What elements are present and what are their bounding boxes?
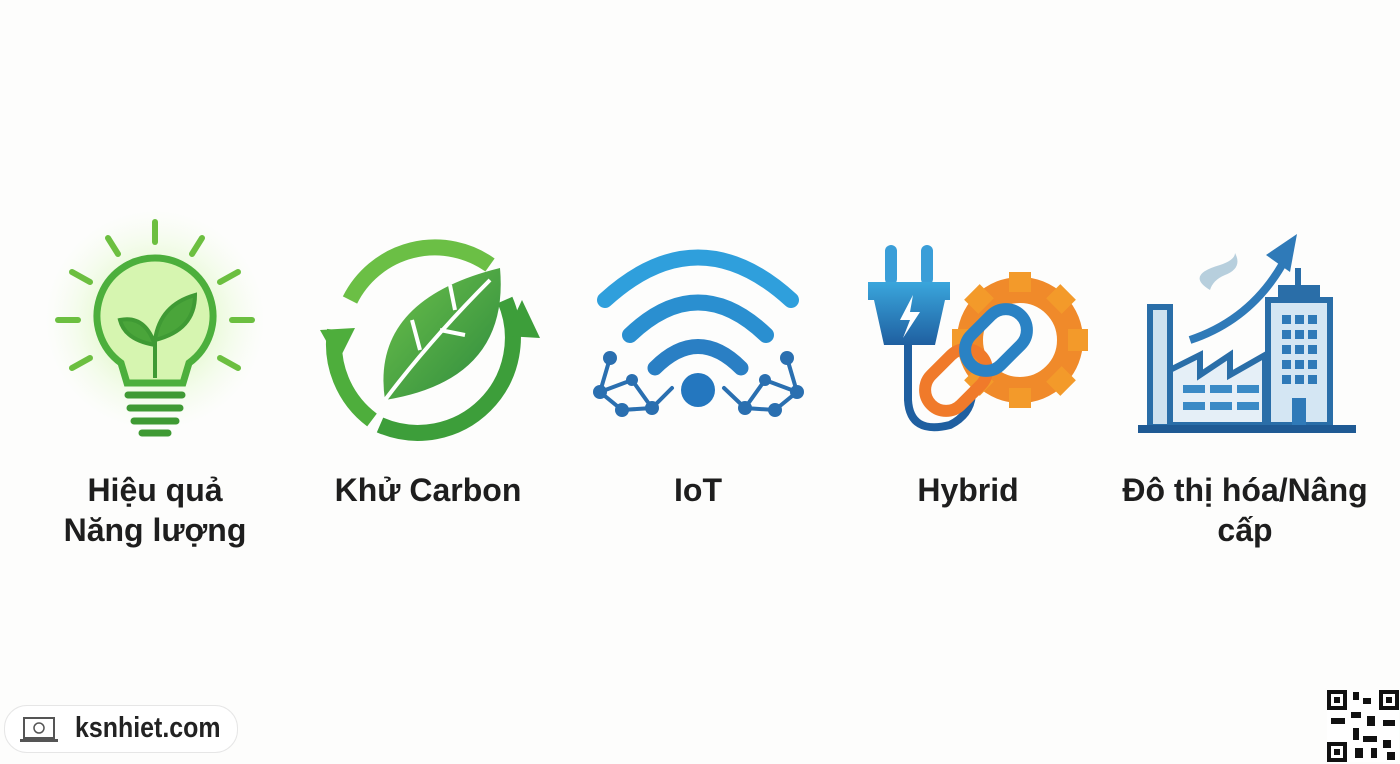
QR code bbox=[1327, 690, 1399, 762]
label: energy efficiency: Năng lượng bbox=[64, 512, 246, 548]
website text: ksnhiet.com bbox=[75, 712, 221, 744]
label: hybrid: Hybrid bbox=[917, 472, 1019, 508]
label: urbanization bbox=[1122, 472, 1368, 548]
label: energy efficiency bbox=[64, 472, 246, 548]
label: urbanization: Đô thị hóa/Nâng bbox=[1122, 472, 1368, 508]
icon: hybrid plug gear bbox=[868, 245, 1088, 427]
label: IoT: IoT bbox=[674, 472, 722, 508]
icon: IoT wifi bbox=[593, 258, 804, 417]
label: energy efficiency: Hiệu quả bbox=[87, 472, 223, 508]
icon: light bulb bbox=[45, 210, 265, 433]
label: decarbonization: Khử Carbon bbox=[335, 472, 521, 508]
icon: laptop bbox=[20, 717, 58, 742]
icon: leaf recycle bbox=[320, 247, 540, 433]
website badge bbox=[4, 705, 238, 753]
label: urbanization: cấp bbox=[1217, 512, 1273, 548]
icon: factory and building bbox=[1138, 234, 1356, 433]
